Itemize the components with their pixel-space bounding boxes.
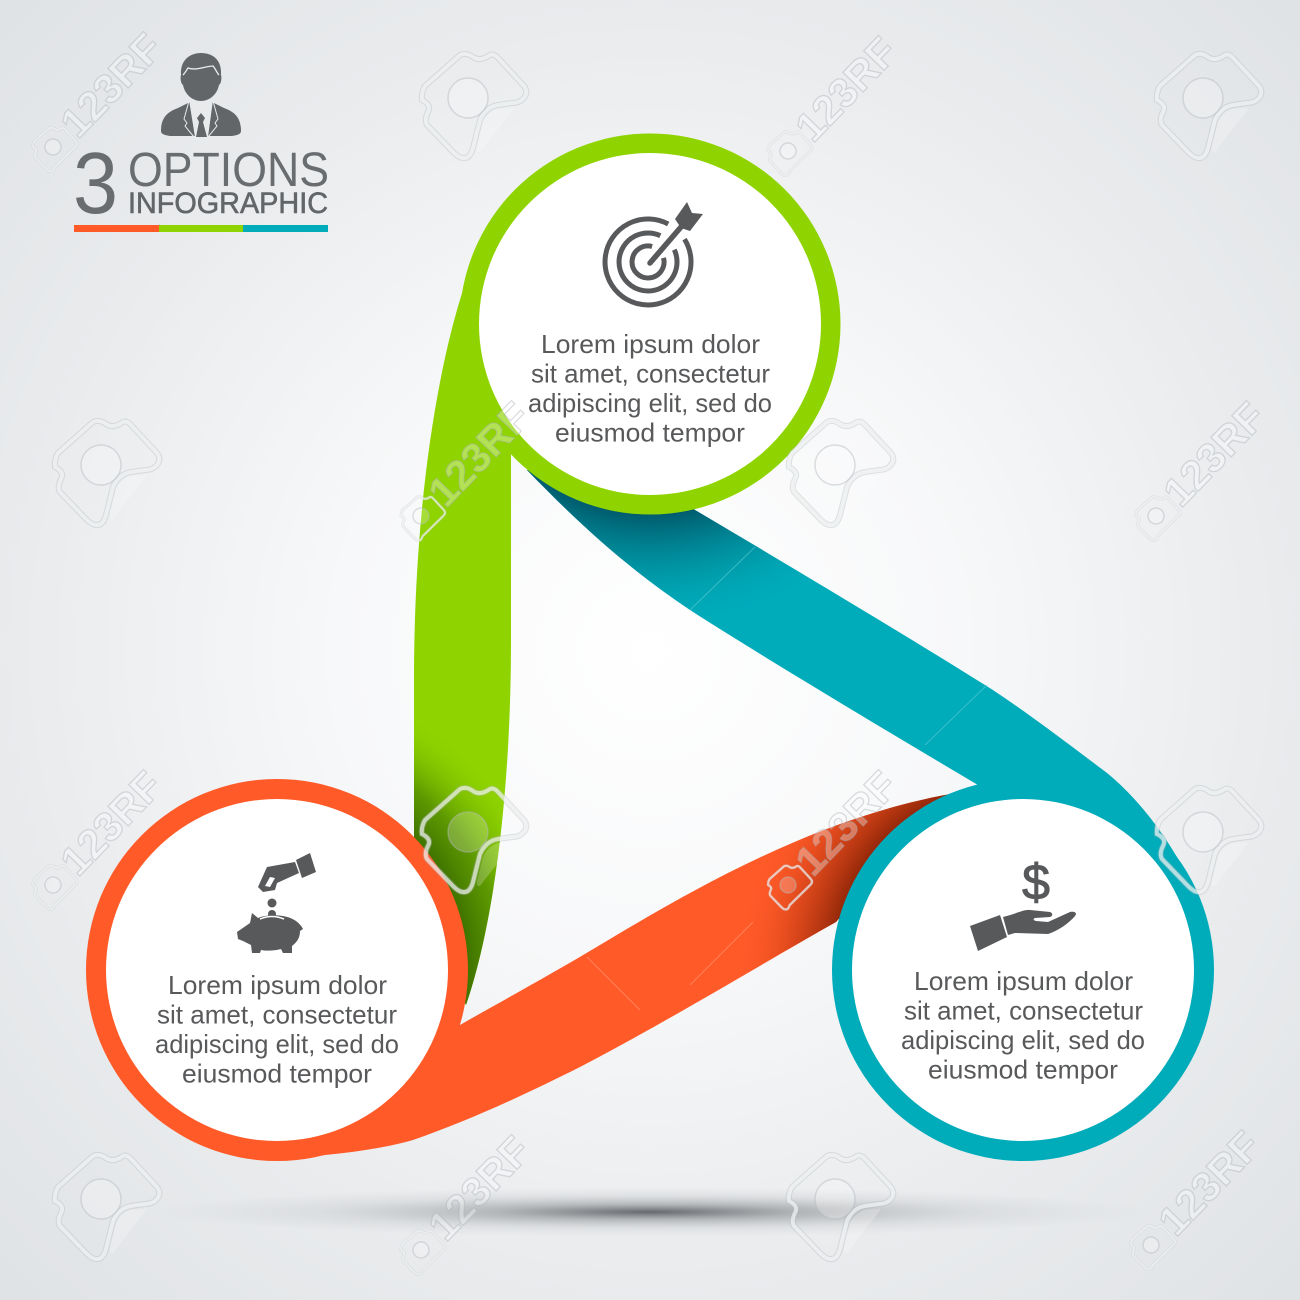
panel: green circle [460, 134, 840, 514]
text block: orange: adipiscing elit, sed do [155, 1029, 399, 1059]
icon: businessman [161, 53, 241, 137]
ribbon: orange [277, 790, 975, 1161]
watermark text: 123RF [1154, 393, 1274, 515]
title block [73, 53, 329, 232]
text block: teal: adipiscing elit, sed do [901, 1025, 1145, 1055]
text block: green: eiusmod tempor [555, 418, 745, 448]
panel: teal circle [832, 779, 1214, 1161]
panel: orange circle [86, 779, 468, 1161]
ribbon: teal [527, 460, 1192, 885]
ribbon: green [414, 250, 560, 1005]
text block: green: Lorem ipsum dolor [541, 329, 760, 359]
icon: piggy bank and hand [237, 853, 316, 953]
watermark text: 123RF [419, 1127, 539, 1249]
text block: green: adipiscing elit, sed do [528, 388, 772, 418]
text block: teal: Lorem ipsum dolor [914, 966, 1133, 996]
text block: green: sit amet, consectetur [531, 358, 770, 388]
text block: teal: sit amet, consectetur [904, 996, 1143, 1026]
icon: hand with dollar [970, 854, 1076, 951]
text block: green [528, 329, 772, 448]
text block: teal: eiusmod tempor [928, 1054, 1118, 1084]
text block: orange: sit amet, consectetur [157, 1000, 397, 1030]
watermark text: 123RF [786, 28, 906, 150]
text block: orange [155, 970, 399, 1088]
text block: orange: Lorem ipsum dolor [168, 970, 387, 1000]
text block: orange: eiusmod tempor [182, 1058, 372, 1088]
watermark text: 123RF [51, 24, 171, 146]
title: options: OPTIONS [128, 144, 329, 197]
watermark text: 123RF [419, 393, 539, 515]
title: 3: 3 [73, 135, 118, 232]
watermark text: 123RF [1149, 1122, 1269, 1244]
icon: target with arrow [605, 202, 703, 305]
icon: hand with dollar: $ [1022, 854, 1050, 910]
colour bar [74, 225, 328, 232]
title: infographic: INFOGRAPHIC [128, 187, 328, 220]
watermark text: 123RF [51, 762, 171, 884]
watermark text: 123RF [786, 762, 906, 884]
ground shadow [150, 1187, 1150, 1237]
text block: teal [901, 966, 1145, 1084]
